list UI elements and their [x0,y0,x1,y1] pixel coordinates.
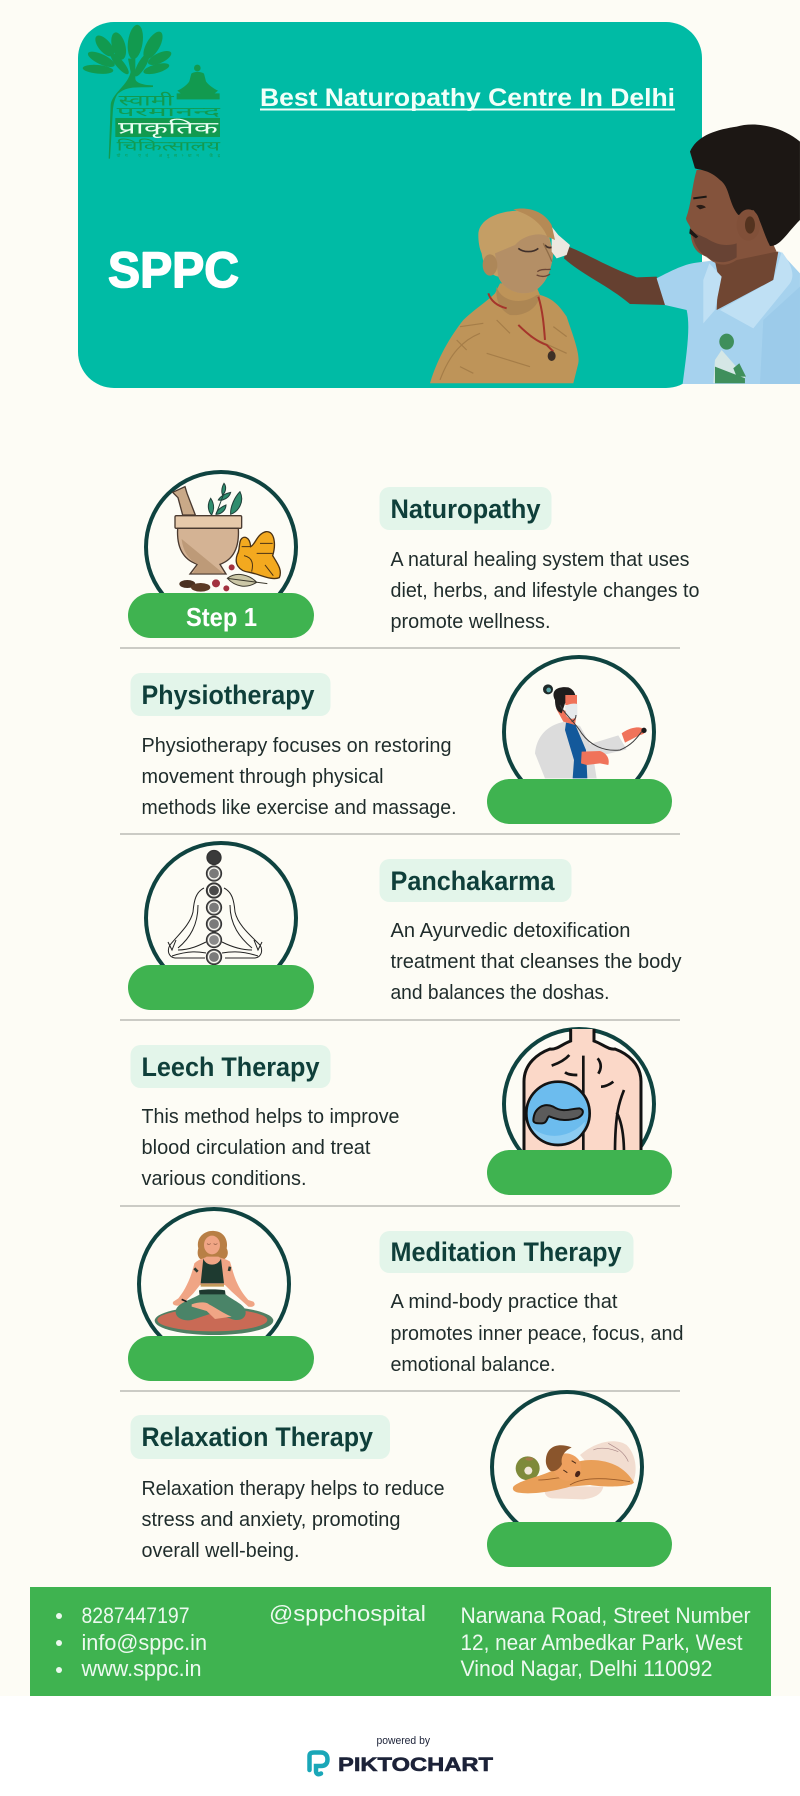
icon: person relaxing during massage [492,1392,642,1542]
text: leech therapy description [142,1106,400,1190]
text: meditation therapy description: emotional balance. [390,1354,556,1376]
text: physiotherapy description: movement through physical [142,766,384,788]
green pill [487,1150,672,1195]
green pill [487,779,672,824]
logo: Swami Parmanand naturopathy: प्राकृतिक [118,119,220,139]
heading chip: naturopathy: Naturopathy [390,494,540,524]
panel: contact footer [30,1587,771,1696]
icon: back with leech magnifier [504,1029,654,1179]
social handle: @sppchospital [269,1601,426,1626]
heading chip: naturopathy [380,487,552,530]
text: naturopathy description: diet, herbs, and lifestyle changes to [390,580,700,602]
text: panchakarma description [390,920,682,1004]
green pill [128,1336,314,1381]
contact list: info@sppc.in [82,1630,207,1655]
photo: mud therapy patient and therapist [430,125,800,384]
heading chip: meditation therapy [380,1231,634,1273]
heading chip: physiotherapy [130,673,330,716]
text: panchakarma description: treatment that cleanses the body [390,951,682,973]
panel: relaxation therapy [130,1392,672,1567]
panel: leech therapy [130,1029,672,1195]
heading chip: relaxation therapy: Relaxation Therapy [142,1422,373,1452]
icon: mortar, herbs and ginger [146,472,296,622]
text: leech therapy description: blood circulation and treat [142,1137,371,1159]
contact list [56,1603,207,1681]
heading chip: leech therapy: Leech Therapy [142,1052,320,1082]
text: naturopathy description: A natural healing system that uses [390,549,690,571]
address: 12, near Ambedkar Park, West [460,1630,742,1655]
text: naturopathy description: promote wellness. [390,611,550,633]
text: panchakarma description: An Ayurvedic detoxification [390,920,630,942]
logo: Swami Parmanand naturopathy: स्वामी [119,91,175,109]
text: meditation therapy description: promotes inner peace, focus, and [390,1323,684,1345]
heading chip: panchakarma [380,859,572,902]
text: relaxation therapy description: overall well-being. [142,1540,300,1562]
text: naturopathy description [390,549,700,633]
panel: meditation therapy [128,1209,684,1381]
brand name: SPPC: SPPC [108,242,239,298]
panel: panchakarma [128,843,682,1010]
powered by piktochart branding: PIKTOCHART [338,1754,493,1776]
text: physiotherapy description: Physiotherapy focuses on restoring [142,735,452,757]
text: meditation therapy description [390,1291,684,1376]
heading chip: meditation therapy: Meditation Therapy [390,1237,622,1267]
heading chip: leech therapy [130,1045,330,1088]
green pill [487,1522,672,1567]
text: physiotherapy description [142,735,456,819]
powered by piktochart branding: powered by [376,1735,430,1747]
heading chip: relaxation therapy [130,1415,390,1459]
powered by piktochart branding [310,1735,493,1776]
text: panchakarma description: and balances the doshas. [390,982,610,1004]
text: relaxation therapy description [142,1478,444,1562]
icon: woman meditating on mat [139,1209,289,1359]
address: Narwana Road, Street Number [460,1603,750,1628]
logo: Swami Parmanand naturopathy: योग एवं अनुसन्धान केंद्र [117,153,221,159]
logo: Swami Parmanand naturopathy: चिकित्सालय [117,138,220,153]
text: physiotherapy description: methods like exercise and massage. [142,797,456,819]
icon: doctor with stethoscope [504,657,654,807]
step pill [128,593,314,638]
icon: meditating figure with chakras [146,843,296,993]
panel: hero banner [78,22,800,388]
logo: Swami Parmanand naturopathy: परमानन्द [117,105,221,119]
heading: best naturopathy centre: Best Naturopathy Centre In Delhi [260,84,675,112]
text: leech therapy description: This method helps to improve [142,1106,400,1128]
address: Vinod Nagar, Delhi 110092 [460,1656,712,1681]
heading chip: physiotherapy: Physiotherapy [142,680,314,710]
green pill [128,965,314,1010]
step pill: Step 1 [186,602,257,632]
text: leech therapy description: various conditions. [142,1168,306,1190]
text: meditation therapy description: A mind-body practice that [390,1291,618,1313]
logo: Swami Parmanand naturopathy [82,24,221,159]
contact list: 8287447197 [82,1603,190,1628]
panel: naturopathy [128,472,700,638]
text: relaxation therapy description: stress and anxiety, promoting [142,1509,400,1531]
contact list: www.sppc.in [81,1656,202,1681]
panel: physiotherapy [130,657,672,824]
address [460,1603,750,1681]
text: relaxation therapy description: Relaxation therapy helps to reduce [142,1478,444,1500]
heading chip: panchakarma: Panchakarma [390,866,555,896]
icon: piktochart logo [310,1752,328,1774]
